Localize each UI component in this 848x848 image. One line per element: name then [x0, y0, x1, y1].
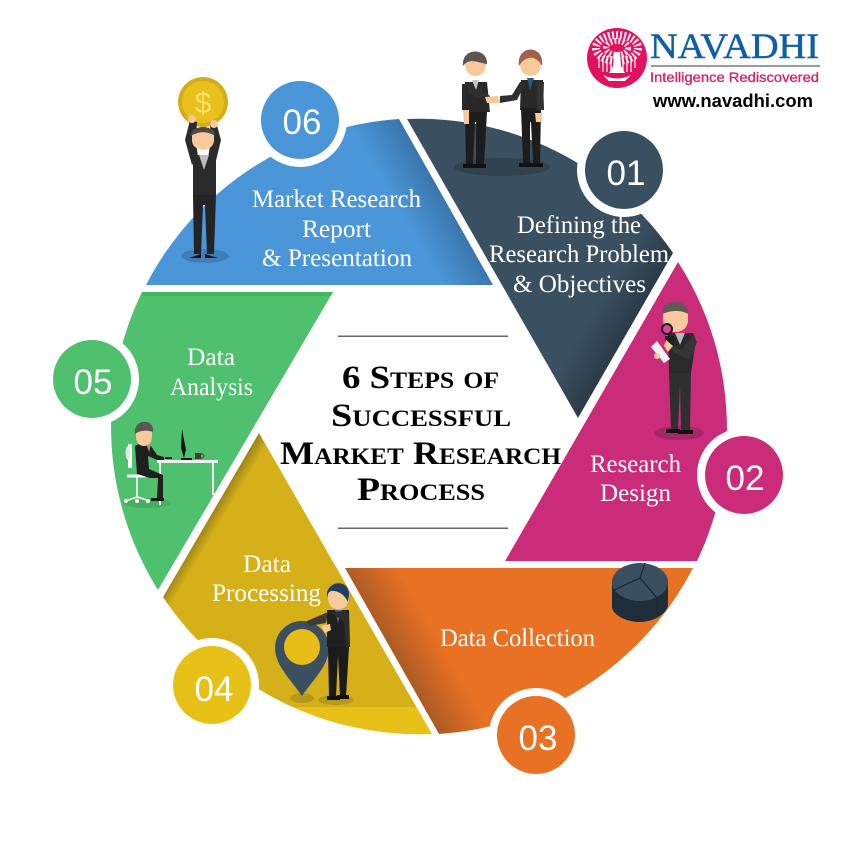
- icon: businessman holding gold coin: [178, 77, 229, 263]
- step 05 number badge: 05: [74, 363, 112, 402]
- label: step 02: [590, 451, 681, 507]
- title: Successful: [331, 398, 511, 434]
- panel: step 04 data processing: [163, 433, 432, 734]
- label: step 02: Design: [600, 480, 671, 507]
- step 03 number badge: 03: [519, 719, 557, 758]
- step 06 number badge: 06: [283, 103, 321, 142]
- step 05 number badge: [45, 332, 139, 426]
- panel: step 03 data collection: [345, 563, 693, 734]
- icon: businessman holding gold coin: $: [195, 87, 212, 120]
- panel: step 06 market research report: [146, 77, 493, 285]
- icon: banyan tree seal: [587, 28, 647, 88]
- label: step 06: & Presentation: [262, 245, 413, 272]
- step 04 number badge: 04: [195, 670, 233, 709]
- step 06 number badge: [253, 73, 347, 167]
- icon: businessman with location pin: [275, 583, 354, 705]
- step 02 number badge: 02: [726, 459, 764, 498]
- icon: businessman working at desk: [123, 422, 218, 508]
- icon: two businessmen shaking hands: [454, 50, 550, 176]
- step 02 number badge: [697, 428, 791, 522]
- label: step 05: [170, 344, 253, 401]
- icon: database cylinder pie: [612, 563, 668, 622]
- logo: Navadhi: [587, 26, 820, 111]
- label: step 01: & Objectives: [513, 271, 646, 298]
- label: step 06: Report: [302, 216, 371, 243]
- label: step 01: Defining the: [517, 212, 641, 239]
- label: step 02: Research: [590, 451, 681, 478]
- label: step 01: Research Problem: [489, 241, 670, 268]
- icon: businessman with magnifier and paper: [651, 302, 704, 440]
- label: step 01: [489, 212, 670, 298]
- step 03 number badge: [489, 688, 583, 782]
- label: step 04: Data: [243, 551, 291, 578]
- label: step 06: Market Research: [252, 186, 421, 213]
- title: [280, 360, 561, 508]
- panel: step 05 data analysis: [111, 292, 333, 590]
- label: step 06: [252, 186, 421, 272]
- label: step 04: Processing: [212, 580, 322, 607]
- step 04 number badge: [165, 638, 259, 732]
- title: 6 Steps of: [342, 360, 499, 396]
- step 01 number badge: 01: [607, 154, 645, 193]
- brand name: NAVADHI: [650, 26, 819, 66]
- title: Market Research: [280, 436, 561, 472]
- panel: step 01 defining the research problem: [407, 50, 673, 418]
- tagline: Intelligence Rediscovered: [650, 69, 819, 85]
- label: step 05: Data: [187, 344, 235, 371]
- step 01 number badge: [577, 123, 671, 217]
- panel: step 02 research design: [505, 262, 727, 561]
- title: Process: [357, 472, 485, 508]
- label: step 05: Analysis: [170, 374, 253, 401]
- label: step 03: Data Collection: [440, 625, 595, 652]
- label: step 04: [212, 551, 322, 607]
- website: www.navadhi.com: [652, 91, 813, 111]
